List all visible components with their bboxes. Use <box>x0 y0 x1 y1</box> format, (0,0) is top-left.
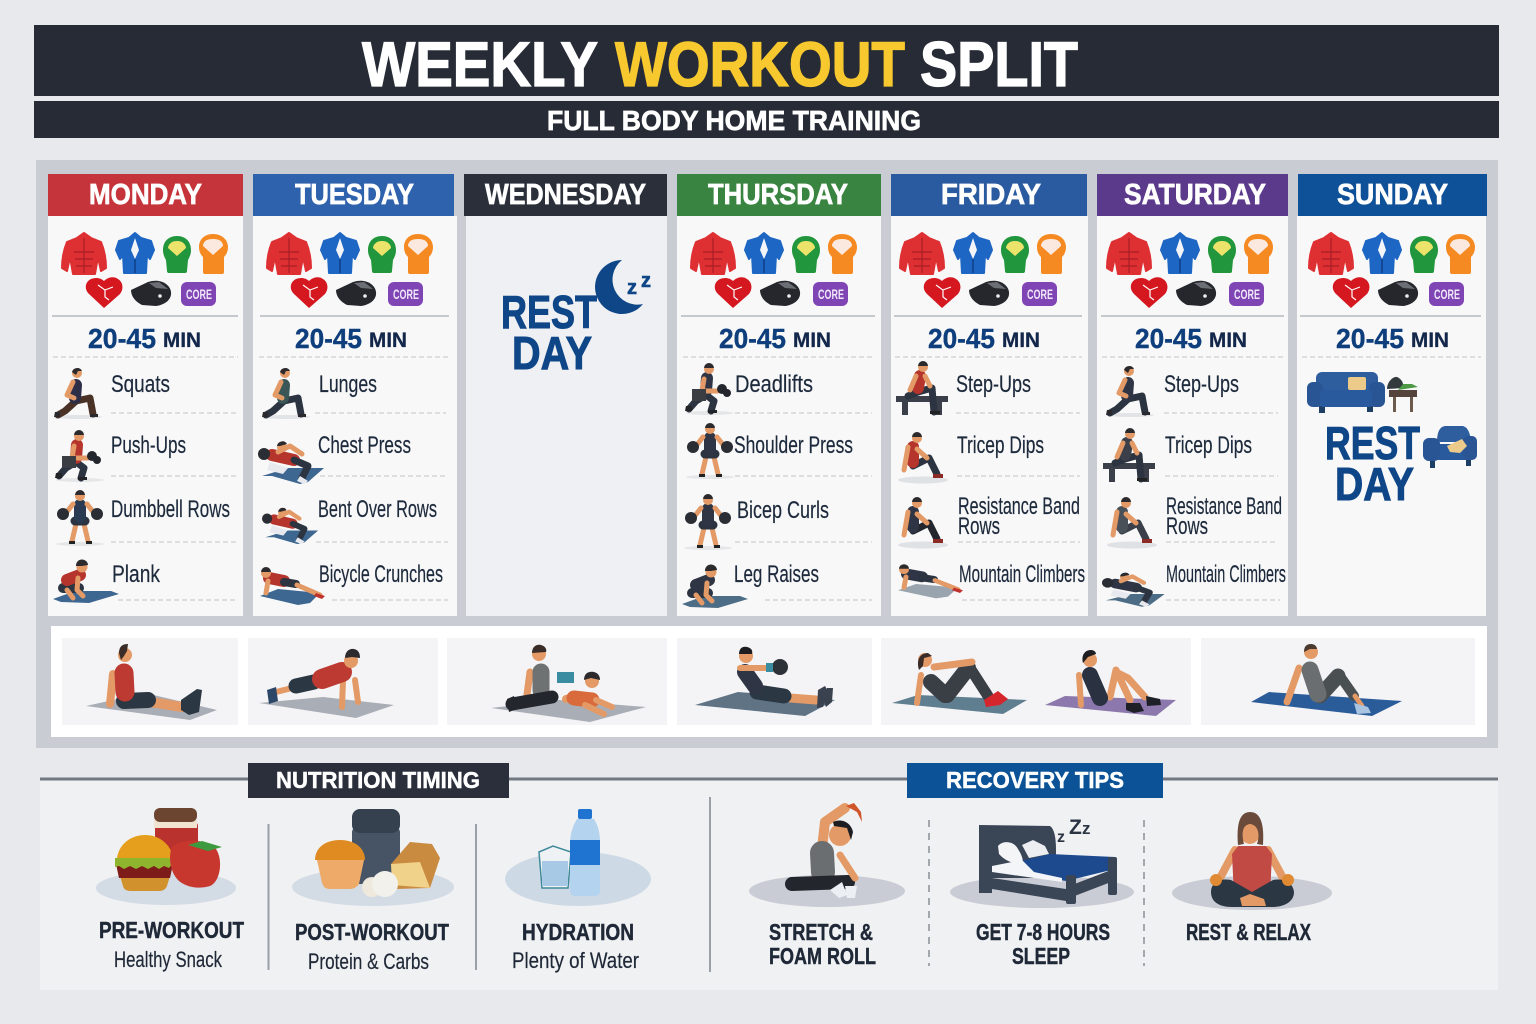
Sunday rest label <box>1325 417 1420 510</box>
Monday muscle icons <box>62 233 228 308</box>
panel: Friday <box>891 174 1088 616</box>
Sunday rest label: REST <box>1325 417 1420 469</box>
Sunday header: SUNDAY <box>1337 179 1448 211</box>
exercise: Tricep Dips: Tricep Dips <box>1165 432 1252 459</box>
Monday header: MONDAY <box>89 179 202 211</box>
icon: stretching person <box>749 803 905 907</box>
Saturday duration: MIN <box>1209 329 1247 352</box>
exercise: Chest Press <box>258 432 411 484</box>
subtitle banner: FULL BODY HOME TRAINING <box>547 105 921 136</box>
panel: Sunday <box>1297 174 1487 616</box>
exercise: Resistance Band Rows: Resistance Band <box>1166 493 1282 520</box>
Monday duration <box>88 323 201 354</box>
panel: Wednesday rest day <box>464 174 667 616</box>
subtitle banner <box>34 101 1499 138</box>
exercise: Resistance Band Rows: Rows <box>1166 513 1208 540</box>
exercise: Plank: Plank <box>112 561 161 588</box>
exercise: Mountain Climbers <box>898 561 1085 598</box>
exercise: Step-Ups <box>1106 366 1239 417</box>
title banner: WORKOUT <box>615 30 905 100</box>
Saturday duration: 20-45 <box>1135 323 1202 354</box>
Friday header: FRIDAY <box>941 179 1041 211</box>
Tuesday muscle icons <box>267 233 433 308</box>
label: post-workout: POST-WORKOUT <box>295 919 449 945</box>
label: rest and relax: REST & RELAX <box>1186 919 1311 945</box>
Wednesday header <box>464 174 667 216</box>
icon: water bottle and glass <box>505 809 651 906</box>
Saturday muscle icons: CORE <box>1234 286 1260 302</box>
lower information band <box>40 780 1498 990</box>
Wednesday rest label: REST <box>501 286 597 338</box>
icon: meditating person <box>1172 812 1332 910</box>
heading: nutrition timing: NUTRITION TIMING <box>276 767 480 793</box>
exercise: Push-Ups: Push-Ups <box>111 432 186 459</box>
figure: partner exercise <box>491 645 646 722</box>
exercise: Chest Press: Chest Press <box>318 432 411 459</box>
label: stretch and foam roll: STRETCH & <box>769 919 873 945</box>
hydration item <box>505 809 651 973</box>
icon: healthy snack <box>96 808 236 905</box>
rest and relax item <box>1172 812 1332 945</box>
Friday muscle icons: CORE <box>1027 286 1053 302</box>
exercise: Plank <box>53 559 161 603</box>
label: protein and carbs: Protein & Carbs <box>308 949 429 974</box>
demonstration strip <box>51 626 1487 737</box>
Thursday duration: MIN <box>793 329 831 352</box>
Tuesday duration: 20-45 <box>295 323 362 354</box>
exercise: Resistance Band Rows: Resistance Band <box>958 493 1080 520</box>
Monday muscle icons: CORE <box>186 286 212 302</box>
label: sleep <box>976 919 1110 969</box>
panel: Tuesday <box>253 174 457 616</box>
exercise: Step-Ups: Step-Ups <box>956 371 1031 398</box>
figure: push-up <box>259 649 394 718</box>
Sunday header <box>1298 174 1487 216</box>
heading: recovery tips: RECOVERY TIPS <box>946 767 1124 793</box>
exercise: Bicep Curls <box>684 494 829 550</box>
Thursday header <box>677 174 881 216</box>
exercise: Mountain Climbers: Mountain Climbers <box>1166 561 1286 588</box>
icon: moon and zzz: z <box>641 270 651 292</box>
exercise: Bicep Curls: Bicep Curls <box>737 497 829 524</box>
icon: bed and zzz: z <box>1057 829 1065 846</box>
Wednesday rest label <box>501 286 597 379</box>
figure: seated leg hold <box>86 644 217 720</box>
exercise: Deadlifts <box>685 363 813 415</box>
exercise: Resistance Band Rows <box>1107 493 1282 548</box>
label: plenty of water: Plenty of Water <box>512 948 639 973</box>
figures: crunch pair on mats <box>892 650 1176 716</box>
Tuesday duration <box>295 323 407 354</box>
exercise: Mountain Climbers: Mountain Climbers <box>959 561 1085 588</box>
exercise: Shoulder Press <box>686 423 853 479</box>
label: hydration: HYDRATION <box>522 919 634 945</box>
exercise: Leg Raises: Leg Raises <box>734 561 819 588</box>
panel: Thursday <box>677 174 881 616</box>
title banner: SPLIT <box>920 30 1078 100</box>
exercise: Bent Over Rows: Bent Over Rows <box>318 496 437 523</box>
figure: seated on blue mat <box>1251 644 1402 716</box>
exercise: Bicycle Crunches <box>260 561 443 605</box>
Sunday duration: MIN <box>1411 329 1449 352</box>
label: sleep: SLEEP <box>1012 943 1070 969</box>
title banner <box>34 25 1499 100</box>
Wednesday header: WEDNESDAY <box>485 179 646 211</box>
label: stretch and foam roll: FOAM ROLL <box>769 943 876 969</box>
Tuesday header <box>253 174 454 216</box>
title banner: WEEKLY <box>362 30 598 100</box>
Friday muscle icons <box>900 233 1066 308</box>
exercise: Tricep Dips <box>898 432 1044 484</box>
icon: bed and zzz: Z <box>1069 816 1082 839</box>
heading: recovery tips <box>907 763 1163 798</box>
exercise: Bent Over Rows <box>262 496 437 544</box>
sleep item <box>950 816 1134 969</box>
icon: sofa and side table <box>1307 372 1418 413</box>
Friday duration: 20-45 <box>928 323 995 354</box>
Sunday rest label: DAY <box>1335 458 1414 510</box>
schedule backdrop panel <box>36 160 1498 748</box>
Thursday header: THURSDAY <box>708 179 848 211</box>
exercise: Mountain Climbers <box>1102 561 1286 607</box>
Wednesday rest label: DAY <box>512 327 592 379</box>
panel: Saturday <box>1097 174 1288 616</box>
post-workout item <box>292 809 454 974</box>
Saturday header: SATURDAY <box>1124 179 1266 211</box>
icon: protein and carbs <box>292 809 454 906</box>
Tuesday duration: MIN <box>369 329 407 352</box>
label: healthy snack: Healthy Snack <box>114 947 223 972</box>
figure: kettlebell crunch <box>695 647 835 716</box>
pre-workout item <box>96 808 244 972</box>
Monday header <box>48 174 243 216</box>
icon: moon and zzz: z <box>627 277 637 299</box>
icon: moon and zzz <box>595 260 651 314</box>
Sunday muscle icons <box>1309 233 1475 308</box>
label: stretch and foam roll <box>769 919 876 969</box>
Thursday muscle icons <box>691 233 857 308</box>
Friday duration: MIN <box>1002 329 1040 352</box>
Sunday duration <box>1336 323 1449 354</box>
exercise: Lunges <box>262 368 377 419</box>
exercise: Leg Raises <box>682 561 819 608</box>
Friday header <box>891 174 1087 216</box>
label: pre-workout: PRE-WORKOUT <box>99 917 244 943</box>
Thursday duration: 20-45 <box>719 323 786 354</box>
exercise: Bicycle Crunches: Bicycle Crunches <box>319 561 443 588</box>
Sunday muscle icons: CORE <box>1434 286 1460 302</box>
Friday duration <box>928 323 1040 354</box>
icon: bed and zzz: z <box>1082 819 1090 838</box>
exercise: Push-Ups <box>55 430 186 482</box>
exercise: Lunges: Lunges <box>319 371 377 398</box>
exercise: Resistance Band Rows: Rows <box>958 513 1000 540</box>
Saturday header <box>1097 174 1288 216</box>
exercise: Tricep Dips <box>1103 428 1252 482</box>
icon: bed and zzz <box>950 816 1134 908</box>
Saturday muscle icons <box>1107 233 1273 308</box>
icon: armchair <box>1423 426 1477 468</box>
heading: nutrition timing <box>248 763 509 798</box>
exercise: Step-Ups: Step-Ups <box>1164 371 1239 398</box>
exercise: Resistance Band Rows <box>898 493 1080 548</box>
exercise: Tricep Dips: Tricep Dips <box>957 432 1044 459</box>
exercise: Dumbbell Rows <box>56 490 230 546</box>
Thursday muscle icons: CORE <box>818 286 844 302</box>
exercise: Squats: Squats <box>111 371 170 398</box>
Tuesday header: TUESDAY <box>295 179 414 211</box>
exercise: Squats <box>54 368 170 419</box>
exercise: Dumbbell Rows: Dumbbell Rows <box>111 496 230 523</box>
exercise: Step-Ups <box>896 361 1031 415</box>
label: sleep: GET 7-8 HOURS <box>976 919 1110 945</box>
Monday duration: 20-45 <box>88 323 156 354</box>
exercise: Deadlifts: Deadlifts <box>735 371 813 398</box>
Thursday duration <box>719 323 831 354</box>
panel: Monday <box>48 174 243 616</box>
Sunday duration: 20-45 <box>1336 323 1404 354</box>
Monday duration: MIN <box>163 329 201 352</box>
exercise: Shoulder Press: Shoulder Press <box>734 432 853 459</box>
Tuesday muscle icons: CORE <box>393 286 419 302</box>
Saturday duration <box>1135 323 1247 354</box>
stretch and foam roll item <box>749 803 905 969</box>
